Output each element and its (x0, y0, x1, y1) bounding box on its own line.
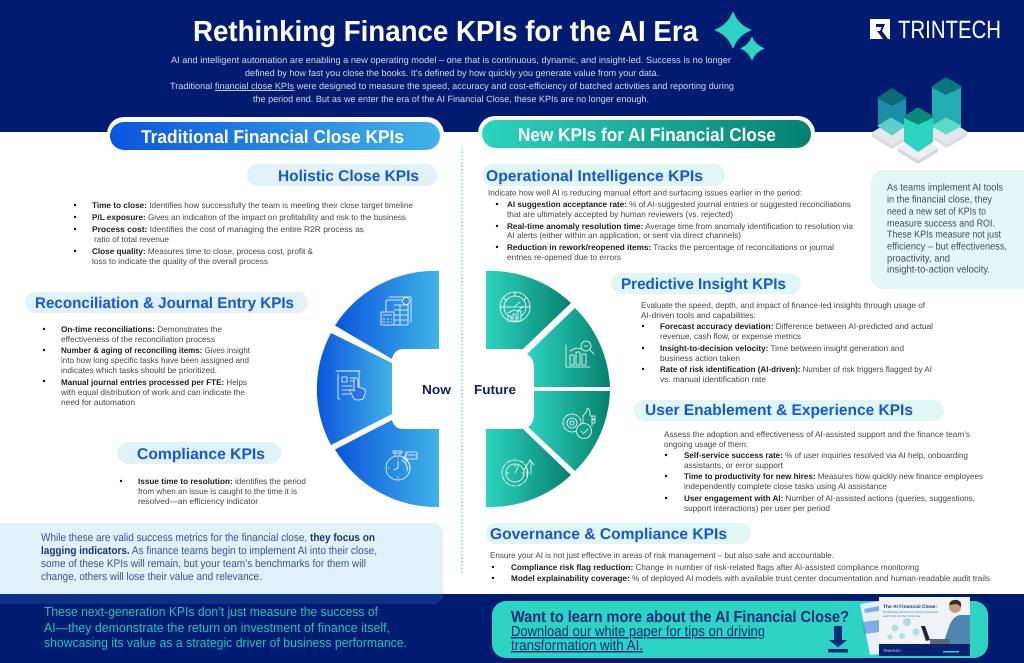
bottom band (0, 594, 1024, 663)
panel: compliance KPIs: from when an issue is caught to the time it is (138, 487, 297, 496)
icon: sparkles (715, 12, 764, 60)
panel: operational intelligence KPIs: Operational Intelligence KPIs (486, 168, 703, 185)
panel: governance and compliance KPIs: Compliance risk flag reduction: Change in number of risk-related flags after AI-assisted compliance monitoring (511, 563, 919, 572)
panel: teal note (871, 170, 1024, 289)
panel: governance and compliance KPIs: Governance & Compliance KPIs (490, 526, 727, 543)
panel: operational intelligence KPIs: AI suggestion acceptance rate: % of AI-suggested journal entries or suggested reconciliations (507, 200, 851, 209)
icon: download arrow (828, 626, 848, 652)
panel: predictive insight KPIs: Evaluate the speed, depth, and impact of finance-led insights through usage of (641, 301, 926, 310)
white paper thumbnail: TRINTECH (883, 649, 901, 653)
panel: reconciliation and journal entry KPIs: Number & aging of reconciling items: Gives insight (61, 346, 251, 355)
segment: bottom left (335, 420, 439, 507)
panel: compliance KPIs (117, 442, 306, 506)
panel: holistic close KPIs: Close quality: Measures time to close, process cost, profit & (92, 247, 314, 256)
intro text (170, 55, 734, 104)
white paper thumbnail: The AI Financial Close: (883, 604, 937, 610)
white paper thumbnail (860, 597, 970, 656)
panel: reconciliation and journal entry KPIs (25, 292, 308, 407)
white paper thumbnail: Redefining Month-End Close Processes (883, 610, 939, 614)
segment: middle left (317, 333, 392, 445)
logo: Trintech (870, 16, 1001, 44)
panel: predictive insight KPIs: Forecast accuracy deviation: Difference between AI-predicted and actual (660, 322, 933, 331)
panel: holistic close KPIs (74, 164, 437, 266)
panel: user enablement and experience KPIs (634, 400, 983, 513)
panel: user enablement and experience KPIs: assistants, or error support (684, 461, 784, 470)
panel: user enablement and experience KPIs: support interactions) per user per period (684, 504, 830, 513)
intro text: Traditional financial close KPIs were designed to measure the speed, accuracy and cost-efficiency of batched activities and reporting during (170, 81, 734, 91)
segment: top left (335, 271, 439, 359)
callout: lagging indicators: lagging indicators. As finance teams begin to implement AI into their close, (41, 545, 377, 557)
panel: compliance KPIs: Issue time to resolution: identifies the period (138, 477, 306, 486)
closing statement (44, 604, 407, 650)
panel: predictive insight KPIs: Predictive Insight KPIs (621, 276, 786, 293)
chart: future half wheel (486, 271, 610, 507)
panel: teal note: measure success and ROI. (887, 218, 995, 230)
callout: lagging indicators: some of these KPIs will remain, but your team’s benchmarks for them will (41, 558, 366, 570)
callout: lagging indicators: While these are valid success metrics for the financial close, they focus on (41, 532, 375, 544)
panel: user enablement and experience KPIs: User engagement with AI: Number of AI-assisted actions (queries, suggestions, (684, 494, 975, 503)
panel: predictive insight KPIs: vs. manual identification rate (660, 375, 766, 384)
segment: bar chart insight (527, 308, 610, 387)
panel: operational intelligence KPIs: that are ultimately accepted by human reviewers (vs. rejected) (507, 210, 733, 219)
right column heading (478, 116, 815, 154)
panel: predictive insight KPIs: revenue, cash flow, or expense metrics (660, 332, 801, 341)
label: Future: Future (474, 382, 516, 397)
panel: holistic close KPIs: Time to close: Identifies how successfully the team is meeting their close target timeline (92, 201, 413, 210)
white paper thumbnail: and KPIs for the New Era (883, 614, 920, 618)
panel: teal note: need a new set of KPIs to (887, 206, 986, 218)
panel: user enablement and experience KPIs: ongoing usage of them: (664, 440, 748, 449)
panel: holistic close KPIs: loss to indicate the quality of the overall process (92, 257, 268, 266)
call to action panel: transformation with AI. (511, 638, 643, 654)
panel: reconciliation and journal entry KPIs: into how long specific tasks have been assigned and (61, 356, 249, 365)
panel: reconciliation and journal entry KPIs: need for automation (61, 398, 135, 407)
call to action panel: Download our white paper for tips on driving (511, 624, 765, 640)
panel: teal note: As teams implement AI tools (887, 182, 1003, 194)
panel: governance and compliance KPIs (486, 523, 990, 583)
closing statement: These next-generation KPIs don’t just measure the success of (44, 604, 378, 619)
panel: reconciliation and journal entry KPIs: Reconciliation & Journal Entry KPIs (35, 295, 294, 312)
panel: user enablement and experience KPIs: Time to productivity for new hires: Measures how quickly new finance employees (684, 472, 983, 481)
intro text: the period end. But as we enter the era of the AI Financial Close, these KPIs are no longer enough. (253, 94, 649, 104)
panel: reconciliation and journal entry KPIs: with equal distribution of work and can indicate the (60, 388, 245, 397)
segment: performance gauge (486, 271, 571, 349)
panel: user enablement and experience KPIs: independently complete close tasks using AI assistance (684, 482, 887, 491)
panel: user enablement and experience KPIs: Self-service success rate: % of user inquiries resolved via AI help, onboarding (684, 451, 968, 460)
intro text: defined by how fast you close the books. It’s defined by how quickly you generate value from your data. (245, 68, 659, 78)
intro text: AI and intelligent automation are enabling a new operating model – one that is continuous, dynamic, and insight-led. Success is no longer (171, 55, 731, 65)
right column heading: New KPIs for AI Financial Close (518, 124, 776, 145)
panel: teal note: insight-to-action velocity. (887, 264, 990, 276)
header band (0, 0, 1024, 132)
icon: isometric bars (872, 78, 967, 164)
panel: compliance KPIs: resolved—an efficiency indicator (138, 497, 258, 506)
segment: gear gauge (486, 429, 571, 507)
chart: now half wheel (317, 271, 439, 507)
label: Now: Now (422, 382, 452, 397)
panel: governance and compliance KPIs: Model explainability coverage: % of deployed AI models with available trust center documentation and human-readable audit trails (511, 574, 990, 583)
panel: operational intelligence KPIs: Indicate how well AI is reducing manual effort and surfacing issues earlier in the period: (488, 188, 802, 198)
left column heading (107, 117, 444, 155)
panel: predictive insight KPIs: Rate of risk identification (AI-driven): Number of risk triggers flagged by AI (660, 365, 932, 374)
logo: Trintech: TRINTECH (898, 16, 1001, 44)
callout: lagging indicators (0, 523, 443, 604)
panel: reconciliation and journal entry KPIs: indicates which tasks should be prioritized. (61, 366, 217, 375)
panel: holistic close KPIs: Process cost: Identifies the cost of managing the entire R2R process as (92, 225, 364, 234)
panel: operational intelligence KPIs: AI alerts (either within an application, or sent via direct channels) (507, 231, 741, 240)
panel: governance and compliance KPIs: Ensure your AI is not just effective in areas of risk management – but also safe and accountable. (490, 551, 834, 560)
panel: operational intelligence KPIs: entries re-opened due to errors (507, 253, 621, 262)
panel: predictive insight KPIs: Insight-to-decision velocity: Time between insight generation and (660, 344, 904, 353)
panel: operational intelligence KPIs: Real-time anomaly resolution time: Average time from anomaly identification to resolution via (507, 222, 853, 231)
segment: engagement gear (528, 391, 610, 471)
panel: user enablement and experience KPIs: Assess the adoption and effectiveness of AI-assisted support and the finance team’s (664, 430, 970, 439)
panel: user enablement and experience KPIs: User Enablement & Experience KPIs (645, 402, 913, 419)
panel: teal note: proactivity, and (887, 254, 950, 264)
call to action panel: Want to learn more about the AI Financial Close? (511, 609, 849, 626)
panel: operational intelligence KPIs: Reduction in rework/reopened items: Tracks the percentage of reconciliations or journal (507, 243, 834, 252)
panel: teal note: in the financial close, they (887, 194, 992, 206)
panel: holistic close KPIs: ratio of total revenue (94, 235, 169, 244)
panel: holistic close KPIs: P/L exposure: Gives an indication of the impact on profitability and risk to the business (92, 213, 406, 222)
callout: lagging indicators: change, others will lose their value and relevance. (41, 571, 262, 583)
closing statement: showcasing its value as a strategic driver of business performance. (44, 635, 407, 650)
panel: predictive insight KPIs: business action taken (660, 354, 740, 363)
panel: teal note: These KPIs measure not just (887, 230, 1001, 240)
closing statement: AI—they demonstrate the return on investment of finance itself, (44, 620, 390, 635)
panel: teal note: efficiency – but effectiveness, (887, 242, 1007, 252)
panel: predictive insight KPIs: AI-driven tools and capabilities: (641, 311, 756, 320)
panel: operational intelligence KPIs (482, 164, 853, 262)
left column heading: Traditional Financial Close KPIs (141, 126, 404, 147)
title: Rethinking Finance KPIs for the AI Era (193, 16, 699, 48)
panel: reconciliation and journal entry KPIs: Manual journal entries processed per FTE: Helps (61, 378, 247, 387)
panel: predictive insight KPIs (611, 273, 933, 384)
call to action panel (492, 597, 988, 658)
panel: compliance KPIs: Compliance KPIs (137, 446, 265, 463)
panel: reconciliation and journal entry KPIs: effectiveness of the reconciliation process (61, 335, 215, 344)
panel: holistic close KPIs: Holistic Close KPIs (278, 168, 419, 185)
panel: reconciliation and journal entry KPIs: On-time reconciliations: Demonstrates the (61, 325, 222, 334)
